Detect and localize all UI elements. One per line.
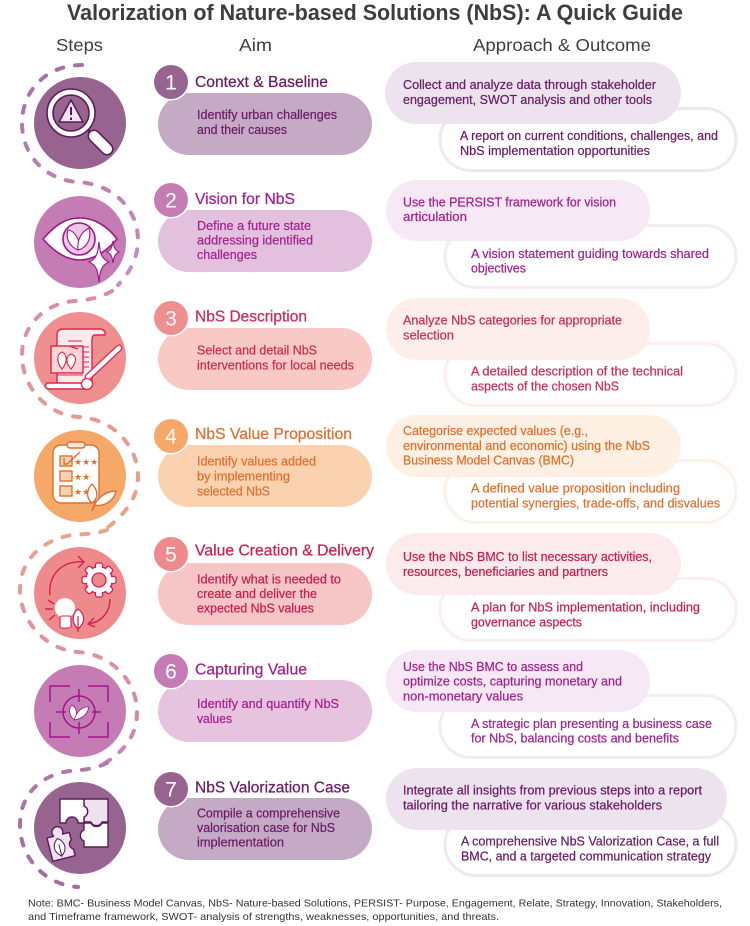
aim text 6: values [197,712,232,726]
outcome text 6: for NbS, balancing costs and benefits [471,732,679,746]
icon: clipboard checklist with stars and leaves: ★★★ [74,458,98,468]
heading 7: NbS Valorization Case [195,780,350,796]
aim text 4: by implementing [197,470,290,484]
aim pill 6 [158,680,372,742]
aim text 2: Define a future state [197,219,311,233]
icon: clipboard checklist with stars and leaves: ★★ [74,488,90,498]
number badge 2 [152,182,190,218]
outcome text 7: BMC, and a targeted communication strategy [461,850,712,864]
outcome text 1 [460,129,718,158]
footnote: Note: BMC- Business Model Canvas, NbS- Nature-based Solutions, PERSIST- Purpose, Engagement, Relate, Strategy, Innovation, Stakeholders, [28,898,722,910]
outcome text 1: NbS implementation opportunities [460,144,650,158]
outcome text 2 [471,247,709,276]
outcome pill 3 [445,344,736,406]
approach text 4: Categorise expected values (e.g., [403,424,588,438]
approach text 2: Use the PERSIST framework for vision [403,196,616,210]
step 5: Value Creation & Delivery [152,533,736,640]
approach text 1: Collect and analyze data through stakeholder [403,78,656,92]
approach text 3 [403,314,622,342]
approach text 4 [403,424,650,468]
outcome text 7 [461,834,719,864]
aim text 2: challenges [197,248,257,262]
aim text 7: valorisation case for NbS [197,821,335,835]
outcome pill 5 [440,578,736,640]
approach pill 4 [386,415,681,477]
outcome text 6: A strategic plan presenting a business case [471,717,712,731]
icon: eye with leaves and sparkles [34,196,126,288]
aim text 5: expected NbS values [197,602,314,616]
aim text 1: and their causes [197,123,287,137]
outcome pill 1 [440,108,736,170]
approach text 7: Integrate all insights from previous steps into a report [403,784,703,798]
outcome text 3: aspects of the chosen NbS [471,380,619,394]
outcome pill 6 [440,696,736,758]
aim text 4: Identify values added [197,454,316,468]
icon: clipboard checklist with stars and leaves: ★★ [74,473,90,483]
aim text 4 [197,454,316,498]
aim text 3 [197,344,354,372]
approach text 5: Use the NbS BMC to list necessary activities, [403,550,652,564]
aim text 1 [197,108,337,137]
approach pill 5 [386,533,681,595]
title: Valorization of Nature-based Solutions (NbS): A Quick Guide [67,0,683,25]
outcome text 6 [471,717,712,746]
aim text 3: interventions for local needs [197,358,354,372]
aim pill 3 [158,328,372,390]
aim pill 2 [158,210,372,272]
approach text 5 [403,550,652,579]
outcome text 3 [471,364,683,394]
approach text 4: Business Model Canvas (BMC) [403,454,574,468]
aim text 5: create and deliver the [197,587,317,601]
aim text 7: implementation [197,836,284,850]
heading 4: NbS Value Proposition [195,426,352,443]
step 6: Capturing Value [152,650,736,758]
approach text 1 [403,78,656,107]
aim text 6: Identify and quantify NbS [197,697,339,711]
approach text 1: engagement, SWOT analysis and other tools [403,93,652,107]
outcome pill 7 [445,814,736,876]
dashed connector path [20,65,138,887]
outcome pill 4 [445,460,736,522]
aim pill 4 [158,445,372,507]
icon: scroll document with pen [34,312,126,404]
number badge 5: 5 [165,544,177,566]
approach pill 2 [386,180,650,241]
outcome text 5: A plan for NbS implementation, including [471,600,700,614]
number badge 4: 4 [165,426,177,448]
number badge 6 [152,652,190,690]
approach text 5: resources, beneficiaries and partners [403,565,608,579]
column header: approach and outcome: Approach & Outcome [473,35,651,55]
aim text 2 [197,219,313,262]
aim text 4: selected NbS [197,484,270,498]
outcome text 1: A report on current conditions, challenges, and [460,129,718,143]
column header: aim: Aim [239,35,272,55]
step 1: Context & Baseline [152,62,736,170]
step 4: NbS Value Proposition [152,415,736,522]
aim text 5 [197,572,341,616]
aim text 7 [197,806,340,850]
approach pill 6 [386,650,650,712]
number badge 3 [152,300,190,336]
icon: value cycle with gear and light bulb [34,547,126,639]
approach text 2 [403,196,616,224]
heading 6: Capturing Value [195,662,307,678]
approach text 3: selection [403,328,454,342]
outcome text 3: A detailed description of the technical [471,364,683,378]
outcome text 2: A vision statement guiding towards shared [471,247,709,261]
footnote [28,898,722,923]
number badge 2: 2 [165,190,177,212]
step 7: NbS Valorization Case [152,768,736,876]
footnote: and Timeframe framework, SWOT- analysis of strengths, weaknesses, opportunities, and threats. [28,911,499,923]
column header: steps: Steps [56,35,103,55]
heading 3: NbS Description [195,308,307,326]
aim text 7: Compile a comprehensive [197,806,340,820]
heading 2: Vision for NbS [195,191,295,208]
icon: magnifier with warning triangle [34,77,126,169]
outcome text 4: potential synergies, trade-offs, and disvalues [471,496,720,510]
step 2: Vision for NbS [152,180,736,288]
number badge 1 [152,64,190,100]
approach text 7: tailoring the narrative for various stakeholders [403,798,662,812]
outcome text 4 [471,482,720,510]
approach text 6: non-monetary values [403,690,523,704]
icon: target on leaves [34,665,126,757]
icon: clipboard checklist with stars and leaves [34,430,126,522]
approach text 3: Analyze NbS categories for appropriate [403,314,622,328]
approach text 6 [403,660,622,704]
approach text 2: articulation [403,210,467,224]
heading 5: Value Creation & Delivery [195,542,374,560]
icon: puzzle pieces with leaf [34,782,126,874]
number badge 7: 7 [165,778,177,802]
number badge 1: 1 [165,72,177,94]
number badge 6: 6 [165,660,177,684]
aim text 5: Identify what is needed to [197,572,341,586]
approach text 4: environmental and economic) using the NbS [403,439,650,453]
heading 1: Context & Baseline [195,74,328,91]
approach pill 7 [386,768,727,830]
outcome text 4: A defined value proposition including [471,482,680,496]
aim text 1: Identify urban challenges [197,108,337,122]
aim pill 1 [158,93,372,155]
aim text 6 [197,697,339,726]
approach text 6: Use the NbS BMC to assess and [403,660,583,674]
outcome text 2: objectives [471,262,526,276]
number badge 7 [152,770,190,808]
aim pill 5 [158,563,372,625]
number badge 3: 3 [165,308,177,330]
approach pill 1 [385,62,681,124]
outcome text 5 [471,600,700,630]
outcome text 7: A comprehensive NbS Valorization Case, a full [461,834,719,848]
number badge 5 [152,536,190,572]
outcome pill 2 [445,226,736,288]
approach text 6: optimize costs, capturing monetary and [403,674,622,688]
aim pill 7 [158,798,372,860]
approach pill 3 [386,298,650,360]
aim text 2: addressing identified [197,234,313,248]
aim text 3: Select and detail NbS [197,344,317,358]
approach text 7 [403,784,703,812]
number badge 4 [152,418,190,454]
step 3: NbS Description [152,298,736,406]
outcome text 5: governance aspects [471,616,582,630]
